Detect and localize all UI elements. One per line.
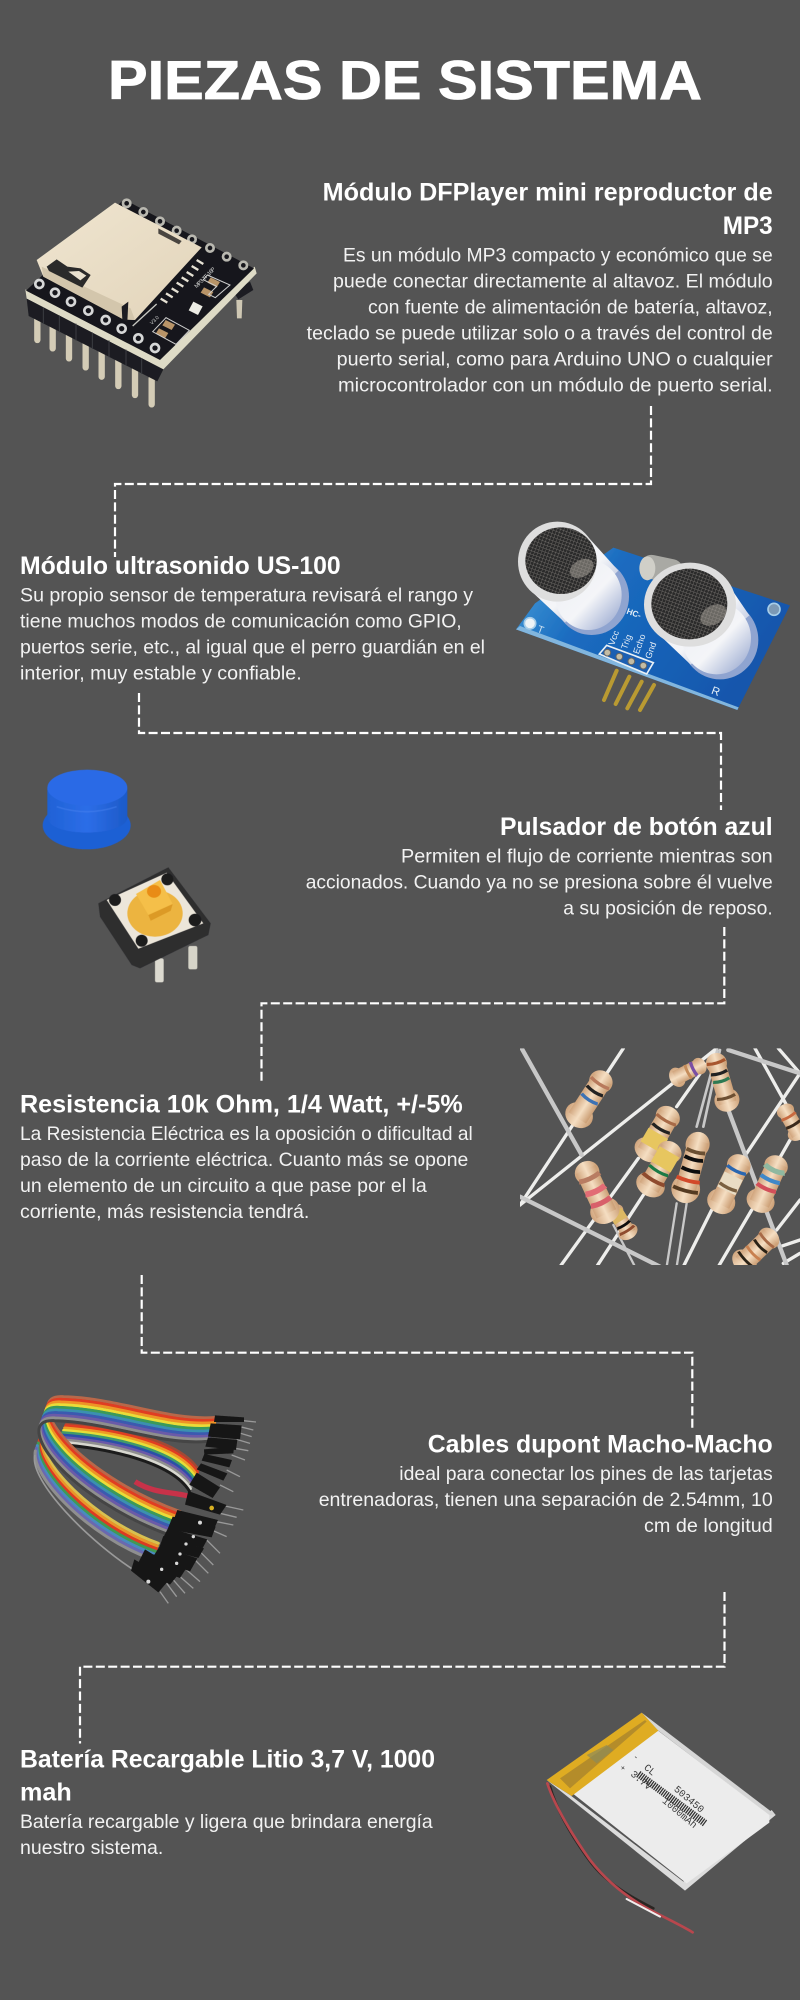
description: entrenadoras, tienen una separación de 2.54mm, 10: [319, 1489, 773, 1511]
smd components: [207, 277, 220, 287]
battery label: 3.7V: [628, 1769, 654, 1793]
connector: resistor to cables: [142, 1275, 692, 1430]
mount holes: [524, 618, 536, 629]
connector: DFPlayer to ultrasonic: [115, 406, 651, 557]
corner dots: [109, 873, 201, 947]
blue cap: [43, 770, 131, 849]
description: microcontrolador con un módulo de puerto serial.: [338, 374, 773, 396]
yellow actuator: [127, 890, 183, 937]
icon: ultrasonic sensor: HC-: [625, 606, 643, 620]
gold pins: [604, 671, 654, 710]
pins: [37, 315, 152, 404]
text: DFPlayer module: [307, 179, 773, 396]
barcode: [638, 1774, 705, 1823]
description: teclado se puede utilizar solo o a través del control de: [307, 322, 773, 344]
description: [20, 1811, 433, 1859]
description: [306, 845, 773, 919]
black and red wires: [550, 1787, 653, 1908]
heading: [323, 179, 773, 240]
battery side: [547, 1780, 776, 1891]
pins: [160, 1421, 256, 1603]
icon: DFPlayer mini module: V3.0: [149, 315, 161, 326]
slot contacts: [161, 260, 203, 303]
icon: lithium battery: [547, 1713, 776, 1932]
description: ideal para conectar los pines de las tarjetas: [399, 1463, 773, 1485]
icon: ultrasonic sensor: Gnd: [643, 641, 658, 660]
connector: ultrasonic to button: [139, 693, 721, 810]
description: con fuente de alimentación de batería, altavoz,: [368, 296, 773, 318]
text: battery: [20, 1745, 435, 1859]
heading: mah: [20, 1779, 72, 1807]
middle ribbon: [58, 1423, 198, 1491]
connector: cables to battery: [80, 1592, 724, 1744]
resistor bands and bodies: [560, 1050, 800, 1279]
description: accionados. Cuando ya no se presiona sobre él vuelve: [306, 871, 773, 893]
header outline: [599, 645, 653, 674]
battery face: [572, 1731, 769, 1883]
icon: DFPlayer mini module: MP3-TF-16P: [194, 266, 217, 290]
description: un elemento de un circuito a que pase por el la: [20, 1175, 427, 1197]
crystal: [638, 553, 685, 585]
battery label: CL: [641, 1762, 658, 1778]
header blocks: [27, 299, 163, 381]
description: [319, 1463, 773, 1537]
front holes: [35, 280, 159, 352]
heading: Cables dupont Macho-Macho: [428, 1431, 773, 1459]
icon: blue button and tactile switch: [43, 770, 211, 982]
icon: ultrasonic sensor: Echo: [631, 633, 648, 655]
heading: [20, 1745, 435, 1807]
back holes: [123, 200, 247, 269]
battery label: 503450: [671, 1784, 706, 1815]
connector: button to resistor: [262, 927, 724, 1081]
heading: MP3: [723, 212, 773, 240]
wires: [520, 1048, 800, 1267]
description: [307, 244, 773, 396]
description: Batería recargable y ligera que brindara energía: [20, 1811, 433, 1833]
icon: ultrasonic sensor: Trig: [619, 633, 634, 651]
description: Su propio sensor de temperatura revisará el rango y: [20, 584, 473, 606]
lower ribbon: [34, 1435, 158, 1574]
heading: Pulsador de botón azul: [500, 813, 773, 841]
description: interior, muy estable y confiable.: [20, 662, 302, 684]
pcb: [26, 199, 254, 360]
description: Es un módulo MP3 compacto y económico que se: [343, 244, 773, 266]
battery label: -: [631, 1753, 640, 1763]
description: corriente, más resistencia tendrá.: [20, 1201, 309, 1223]
card slot: [37, 203, 202, 320]
heading: Módulo DFPlayer mini reproductor de: [323, 179, 773, 207]
text: ultrasonic module: [20, 552, 485, 684]
icon: ultrasonic sensor: T: [536, 624, 545, 637]
text: resistor: [20, 1091, 473, 1223]
description: [20, 584, 485, 684]
description: a su posición de reposo.: [563, 897, 773, 919]
connectors top: [185, 1415, 244, 1515]
description: puerto serial, como para Arduino UNO o cualquier: [337, 348, 773, 370]
right transducer: [682, 601, 758, 679]
yellow tape: [547, 1713, 658, 1796]
text: blue button: [306, 813, 773, 919]
connectors bottom: [131, 1510, 218, 1592]
text: dupont cables: [319, 1431, 773, 1537]
icon: ultrasonic sensor: R: [710, 685, 721, 699]
icon: ultrasonic sensor: [516, 522, 790, 710]
upper ribbon: [39, 1397, 217, 1536]
heading: Batería Recargable Litio 3,7 V, 1000: [20, 1745, 435, 1773]
description: Permiten el flujo de corriente mientras son: [401, 845, 773, 867]
board edge: [25, 267, 257, 369]
pins: [155, 958, 164, 982]
title: PIEZAS DE SISTEMA: [108, 49, 702, 111]
description: puertos serie, etc., al igual que el perro guardián en el: [20, 636, 485, 658]
battery label: 1000mAh: [660, 1796, 699, 1831]
battery label: +: [617, 1764, 627, 1774]
switch body: [98, 867, 211, 968]
description: puede conectar directamente al altavoz. El módulo: [333, 270, 773, 292]
icon: resistors: [520, 1048, 800, 1279]
description: La Resistencia Eléctrica es la oposición o dificultad al: [20, 1123, 473, 1145]
description: paso de la corriente eléctrica. Cuanto más se opone: [20, 1149, 468, 1171]
blue board: [516, 548, 790, 710]
icon: DFPlayer mini module: [25, 199, 257, 404]
description: nuestro sistema.: [20, 1837, 163, 1859]
battery label: [617, 1753, 706, 1831]
description: [20, 1123, 473, 1223]
description: cm de longitud: [644, 1515, 773, 1537]
back pin: [236, 300, 242, 318]
heading: Resistencia 10k Ohm, 1/4 Watt, +/-5%: [20, 1091, 463, 1119]
icon: ultrasonic sensor: Vcc: [606, 629, 621, 647]
icon: dupont cables: [34, 1397, 256, 1603]
left transducer: [554, 558, 629, 635]
description: tiene muchos modos de comunicación como GPIO,: [20, 610, 462, 632]
heading: Módulo ultrasonido US-100: [20, 552, 341, 580]
